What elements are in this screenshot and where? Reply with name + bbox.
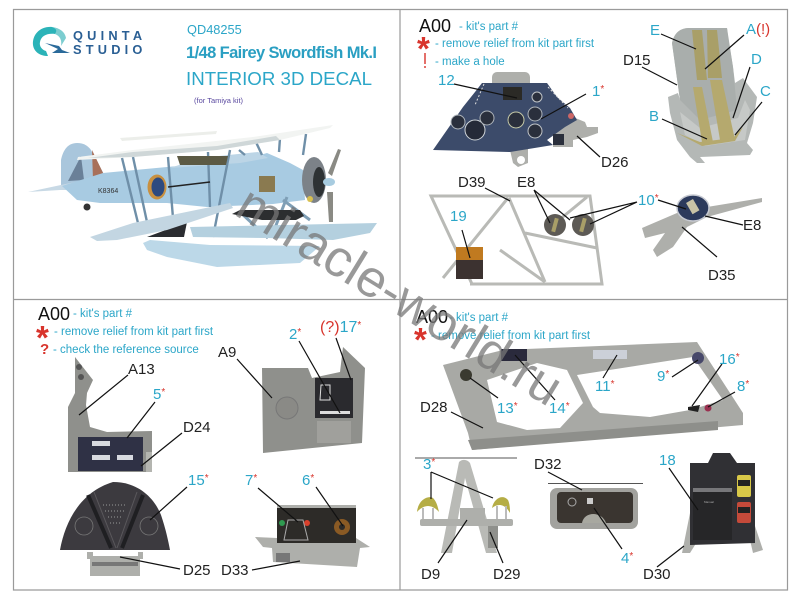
callouts: D28 frame: * [736,352,740,363]
callouts: A13 panel: 5 [153,386,161,403]
callouts: D32 part 4: 4 [621,550,629,567]
callouts: A13 panel: D24 [183,419,211,436]
instrument panel with D26 [433,72,598,167]
callouts: D33 and parts 6 7: * [253,473,257,484]
part D32 panel [548,484,643,529]
callouts: D39: * [655,193,659,204]
gunsight frame D39 [431,196,602,284]
roundel [148,174,166,200]
legend: top right: - kit's part # [459,21,519,33]
illustration: Fairey Swordfish seaplane [28,125,377,267]
legend: bottom left: - remove relief from kit part first [54,326,214,338]
callouts: seat labels: D15 [623,52,651,69]
title block: INTERIOR 3D DECAL [186,68,372,89]
callouts: instrument panel: 12 [438,72,455,89]
legend: bottom left: - check the reference source [53,344,199,356]
logo: Quinta Studio [33,27,147,57]
legend: bottom left [36,304,214,358]
cowling and engine [302,157,326,203]
title block: 1/48 Fairey Swordfish Mk.I [186,44,377,62]
callouts: A9: 2 [289,326,297,343]
callouts: seat labels [623,21,771,139]
part D28 frame [443,342,743,450]
lower float [143,240,320,267]
callouts: gun mount: E8 [743,217,761,234]
far upper wing [120,131,217,141]
callouts: D32 part 4 [534,456,633,567]
seat with harness [668,28,757,163]
callouts: A13 panel: A13 [128,361,155,378]
callouts: D25 and part 15: 15 [188,472,205,489]
callouts: D28 frame: 14 [549,400,566,417]
callouts: instrument panel: * [600,84,604,95]
callouts: D39: E8 [517,174,535,191]
gun mount with E8 [642,195,762,257]
tailplane [28,181,127,192]
callouts: D28 frame: * [745,379,749,390]
callouts: D25 and part 15 [120,472,211,579]
legend: top right: - make a hole [435,56,505,68]
callouts: D28 frame: 9 [657,368,665,385]
part 19 block [456,247,483,279]
crew [177,156,228,165]
callouts: instrument panel [438,72,629,171]
callouts: seat labels: A(!) [746,21,770,38]
title block [186,22,377,105]
callouts: D25 and part 15: * [205,473,209,484]
legend: bottom right: - kit's part # [449,312,509,324]
callouts: A9: * [297,327,301,338]
callouts: D39: D39 [458,174,486,191]
callouts: A9: A9 [218,344,236,361]
legend: top right [417,16,595,68]
part D30 panel with part 18 [682,453,763,553]
part A13 with D24 and panel 5 [68,357,152,472]
callouts: instrument panel: D26 [601,154,629,171]
callouts: seat labels: B [649,108,659,125]
legend: bottom left: ? [40,341,49,358]
callouts: D28 frame: D28 [420,399,448,416]
callouts: gun mount [658,200,761,284]
legend: bottom right: A00 [416,307,448,327]
callouts: A9: (?)17 [320,319,357,336]
torpedo and rigging [232,210,304,220]
instrument plate [259,176,275,192]
part D30 panel with part 18: Manual [704,500,714,504]
callouts: D28 frame: 8 [737,378,745,395]
callouts: D30 part 18: 18 [659,452,676,469]
legend: bottom right: - remove relief from kit part first [431,330,591,342]
legend: bottom left: - kit's part # [73,308,133,320]
callouts: D33 and parts 6 7 [221,472,343,579]
callouts: D28 frame: 11 [595,378,611,395]
callouts: D9 D29 part 3: D9 [421,566,440,583]
upper wing [77,125,333,160]
callouts: D9 D29 part 3: 3 [423,456,431,473]
title block: QD48255 [187,22,242,37]
part 15 dark bulkhead with D25 [60,482,170,576]
callouts: D28 frame: * [514,401,518,412]
callouts: A9 [218,319,361,413]
callouts: D39: 10 [638,192,655,209]
legend: bottom left: * [36,319,49,356]
callouts: A13 panel: * [161,387,165,398]
callouts: D33 and parts 6 7: D33 [221,562,249,579]
callouts: seat labels: C [760,83,771,100]
watermark: miracle-world.ru [227,175,572,417]
callouts: D9 D29 part 3: * [431,457,435,468]
part A9 with panels 2 and 17 [262,347,365,453]
callouts: gun mount: D35 [708,267,736,284]
callouts: seat labels: E [650,22,660,39]
logo: Quinta Studio: STUDIO [73,42,147,57]
callouts: D28 frame: * [665,369,669,380]
callouts: A13 panel [79,361,211,466]
struts [122,134,306,237]
fuselage code: K8364 [98,188,118,195]
callouts: seat labels: D [751,51,762,68]
callouts: D30 part 18: D30 [643,566,671,583]
callouts: D33 and parts 6 7: 7 [245,472,253,489]
legend: top right: - remove relief from kit part first [435,38,595,50]
legend: top right: * [417,30,430,67]
callouts: D28 frame: 13 [497,400,514,417]
upper float [190,223,377,240]
callouts: D9 D29 part 3 [421,456,521,583]
parts D9 and D29 [415,458,517,553]
callouts: D33 and parts 6 7: 6 [302,472,310,489]
lower wing [90,203,233,241]
callouts: D32 part 4: * [629,551,633,562]
tail fin [61,143,106,186]
tail wheel [84,204,90,210]
callouts: D28 frame [420,351,749,428]
legend: bottom right [414,307,591,358]
callouts: D30 part 18 [643,452,698,583]
callouts: D33 and parts 6 7: * [310,473,314,484]
callouts: instrument panel: 1 [592,83,600,100]
callouts: A9: * [357,320,361,331]
callouts: D9 D29 part 3: D29 [493,566,521,583]
callouts: D25 and part 15: D25 [183,562,211,579]
logo: Quinta Studio: QUINTA [73,28,146,43]
part D33 console with panels 6 and 7 [255,505,370,567]
fuselage [62,153,305,207]
callouts: D32 part 4: D32 [534,456,562,473]
title block: (for Tamiya kit) [194,96,244,105]
legend: top right: A00 [419,16,451,36]
legend: bottom left: A00 [38,304,70,324]
callouts: D28 frame: * [566,401,570,412]
legend: bottom right: * [414,321,427,358]
callouts: D28 frame: 16 [719,351,736,368]
callouts: D28 frame: * [611,379,615,390]
callouts: D39: 19 [450,208,467,225]
callouts: D39 [450,174,659,258]
